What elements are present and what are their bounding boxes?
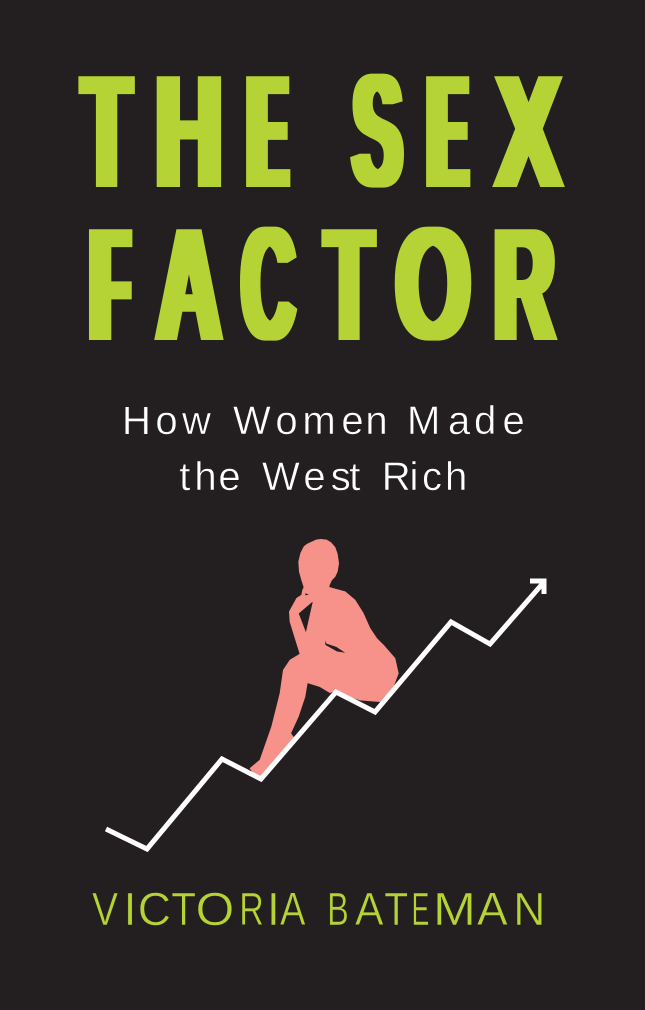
author surname: A <box>477 883 508 935</box>
title line: THE SEX: X <box>496 43 561 222</box>
author first name: A <box>280 884 306 935</box>
icon: seated woman silhouette <box>250 539 398 778</box>
title line: THE SEX <box>82 41 561 222</box>
author surname: B <box>327 884 349 935</box>
author surname: T <box>384 884 408 936</box>
author first name: T <box>171 885 196 936</box>
title line: THE SEX: E <box>250 42 285 222</box>
title line: FACTOR: C <box>242 195 294 374</box>
title line: FACTOR: F <box>92 194 128 375</box>
title line: THE SEX: S <box>353 41 402 221</box>
author first name: R <box>239 883 264 935</box>
title line: FACTOR: O <box>396 194 470 374</box>
author surname: A <box>355 885 384 935</box>
author surname <box>327 883 545 936</box>
title line: THE SEX: H <box>156 41 222 221</box>
author first name: C <box>138 883 171 935</box>
author first name: O <box>196 885 234 936</box>
subtitle: the West Rich <box>179 455 467 499</box>
title line: THE SEX: E <box>430 42 465 222</box>
subtitle: How Women Made <box>122 399 525 443</box>
author surname: E <box>412 883 429 935</box>
author first name: I <box>124 883 136 935</box>
subtitle <box>122 399 525 499</box>
title line: FACTOR: R <box>494 196 554 375</box>
author first name <box>92 883 306 936</box>
arrowhead <box>530 581 544 594</box>
title line: FACTOR <box>92 194 554 375</box>
author first name: V <box>92 884 119 936</box>
author surname: N <box>513 883 545 935</box>
title: THE SEX FACTOR <box>82 41 561 375</box>
author name <box>92 883 545 936</box>
author surname: M <box>433 884 476 935</box>
title line: FACTOR: A <box>157 194 221 375</box>
title line: THE SEX: T <box>82 41 131 221</box>
rising line chart arrow <box>106 581 544 849</box>
title line: FACTOR: T <box>326 195 373 374</box>
author first name: I <box>267 883 280 935</box>
